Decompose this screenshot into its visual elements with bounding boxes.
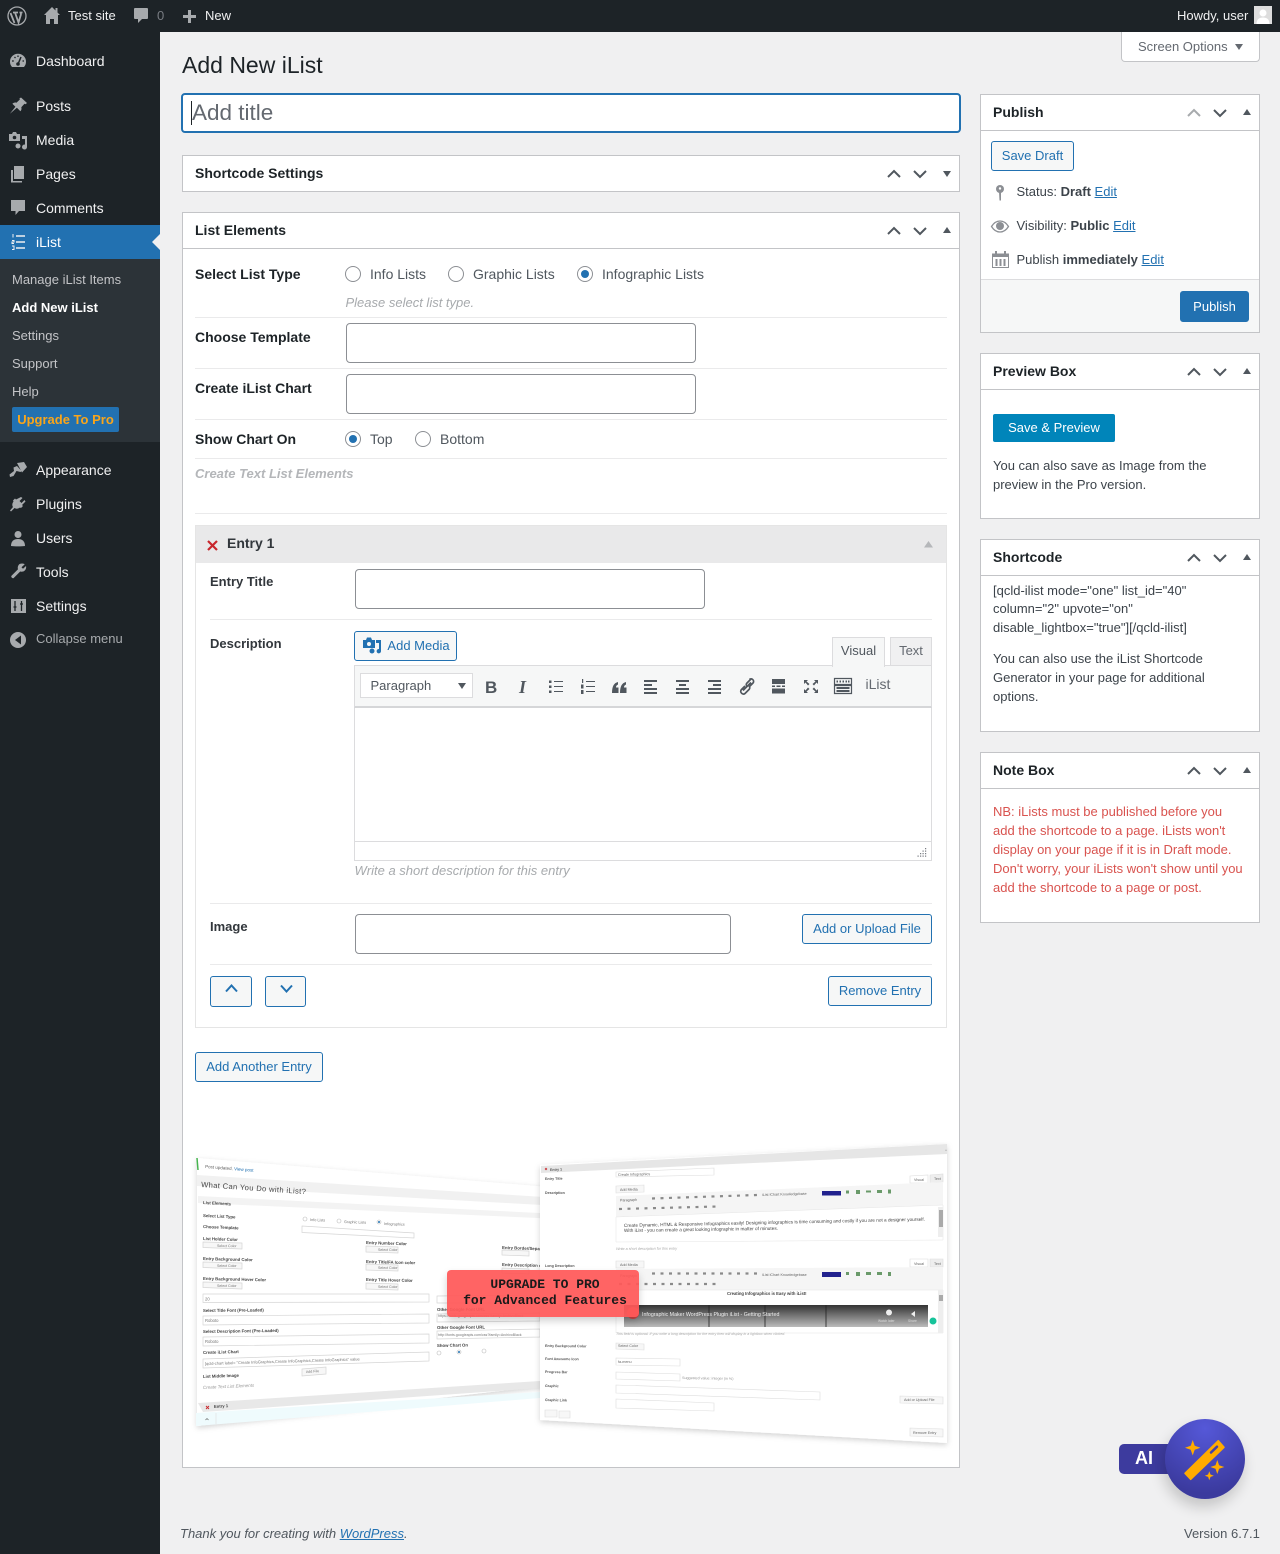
submenu background xyxy=(0,259,160,442)
label: select list type: Select List Type xyxy=(195,266,301,282)
menu: Tools: Tools xyxy=(36,564,69,580)
visibility row: Visibility: Public Edit xyxy=(1016,218,1136,233)
icon: settings xyxy=(11,599,26,613)
icon: users xyxy=(11,531,25,546)
panel: publish xyxy=(980,94,1260,333)
form rows xyxy=(195,266,947,514)
panel controls xyxy=(887,226,951,236)
shortcode note xyxy=(993,651,1205,704)
icon: tools xyxy=(11,564,26,578)
screenshot: right entry editor: iList iChart Knowledgebase xyxy=(762,1192,807,1197)
screen options tab: Screen Options xyxy=(1138,39,1228,54)
add another entry button: Add Another Entry xyxy=(206,1059,312,1074)
option: top: Top xyxy=(370,431,393,447)
entry header xyxy=(196,526,946,563)
label: description: Description xyxy=(210,636,282,651)
add or upload button xyxy=(802,914,932,944)
preview note: preview in the Pro version. xyxy=(993,477,1146,492)
input: image xyxy=(355,914,731,954)
screenshot: left settings form: https://fonts.googleapis.com/css?family=ArchivoBlack xyxy=(438,1314,524,1318)
note text: add the shortcode to a page or post. xyxy=(993,880,1202,895)
screenshot: left settings form: Select Color xyxy=(217,1264,237,1268)
tab: visual: Visual xyxy=(841,643,876,658)
shortcode text xyxy=(993,582,1187,634)
label: show chart on: Show Chart On xyxy=(195,431,296,447)
note text xyxy=(993,804,1243,895)
screenshot: left settings form xyxy=(196,1158,560,1426)
screenshot: left settings form: Select Color xyxy=(378,1285,398,1289)
active item: iList xyxy=(0,225,160,259)
screenshot: right entry editor: Description xyxy=(545,1191,565,1195)
screenshot: left settings form: Create Text List Elements xyxy=(203,1383,255,1390)
submenu: Help: Help xyxy=(12,384,39,399)
screenshot: right entry editor: Select Color xyxy=(618,1344,639,1348)
screenshot: right entry editor: Entry Title xyxy=(545,1177,563,1181)
screenshot: right entry editor: Add or Upload File xyxy=(904,1398,935,1402)
screenshot: right entry editor: This field is optional. If you write a long description for the entry then will display in a lightbox when clicked. xyxy=(616,1332,785,1336)
screenshot: left settings form: Infographics xyxy=(384,1222,405,1227)
note text: add the shortcode to a page. iLists won't xyxy=(993,823,1225,838)
screenshot: left settings form: What Can You Do with iList? xyxy=(201,1180,307,1196)
option: infographic lists: Infographic Lists xyxy=(602,266,704,282)
paragraph select xyxy=(360,673,473,698)
move down button xyxy=(265,976,306,1007)
menu: Appearance: Appearance xyxy=(36,462,112,478)
tab: text: Text xyxy=(899,643,923,658)
screenshot: left settings form: Select Color xyxy=(217,1244,237,1248)
screenshot: left settings form: Entry Background Hover Color xyxy=(203,1276,266,1282)
publish footer xyxy=(981,279,1259,332)
screenshot: left settings form: Info Lists xyxy=(310,1218,325,1223)
upgrade callout: for Advanced Features xyxy=(463,1293,627,1308)
preview note xyxy=(993,458,1206,492)
heading: List Elements xyxy=(195,222,286,238)
upgrade callout xyxy=(447,1270,639,1317)
add media button: Add Media xyxy=(387,638,450,653)
AI label: AI xyxy=(1135,1448,1153,1468)
section note: Create Text List Elements xyxy=(195,466,353,481)
note text: display on your page if it is in Draft mode. xyxy=(993,842,1231,857)
menu: Pages: Pages xyxy=(36,166,76,182)
icon: collapse xyxy=(924,541,933,548)
screenshot: left settings form: Entry Title/FA Icon color xyxy=(366,1259,416,1265)
editor area xyxy=(354,708,932,843)
label: create chart: Create iList Chart xyxy=(195,380,312,396)
note text: NB: iLists must be published before you xyxy=(993,804,1222,819)
input: entry title xyxy=(355,569,705,609)
screenshot: right entry editor: Text xyxy=(934,1262,941,1266)
publish date row: Publish immediately Edit xyxy=(1016,252,1164,267)
sidebar menu xyxy=(0,32,160,1554)
radio group: chart position xyxy=(345,431,431,447)
screenshot: left settings form: Other Google Font URL xyxy=(437,1325,485,1330)
add or upload button: Add or Upload File xyxy=(813,921,921,936)
screenshot: left settings form: http://fonts.googleapis.com/css?family=ArchivoBlack xyxy=(438,1333,522,1337)
panel controls xyxy=(1187,108,1251,118)
screenshot: left settings form: Entry 1 xyxy=(214,1403,229,1409)
icon: posts pin xyxy=(10,98,27,114)
panel: preview box xyxy=(980,353,1260,519)
entry heading: Entry 1 xyxy=(227,535,274,551)
screenshot: right entry editor: Create Dynamic, HTML & Responsive Infographics easily! Designing infographics is time consuming and costly if you are not a designer yourself. xyxy=(624,1217,925,1228)
shortcode note: You can also use the iList Shortcode xyxy=(993,651,1203,666)
screenshot: right entry editor: Infographic Maker WordPress Plugin iList - Getting Started xyxy=(642,1312,779,1318)
footer thanks: Thank you for creating with WordPress. xyxy=(180,1526,408,1540)
remove entry button xyxy=(828,976,932,1006)
paragraph select: Paragraph xyxy=(370,678,431,693)
admin bar xyxy=(0,0,1280,32)
tab: visual xyxy=(832,637,885,667)
screenshot: right entry editor: Entry Background Color xyxy=(545,1344,587,1348)
icon: pages xyxy=(11,166,24,182)
menu: Posts: Posts xyxy=(36,98,71,114)
avatar xyxy=(1254,6,1272,24)
toolbar icons: I xyxy=(518,677,527,697)
note text: Don't worry, your iLists won't show until you xyxy=(993,861,1243,876)
toolbar icons: B xyxy=(485,678,497,697)
screenshot: left settings form: Add File xyxy=(306,1369,319,1374)
new link: New xyxy=(205,8,231,23)
option: bottom: Bottom xyxy=(440,431,484,447)
status row: Status: Draft Edit xyxy=(1016,184,1117,199)
icon: WordPress logo xyxy=(7,6,27,26)
save and preview button xyxy=(993,414,1115,442)
screenshot: left settings form: Entry Number Color xyxy=(366,1240,407,1246)
screenshot: left settings form: List Holder Color xyxy=(203,1236,238,1242)
screenshot: right entry editor: Graphic xyxy=(545,1384,559,1388)
heading: Preview Box xyxy=(993,363,1076,379)
submenu: Settings: Settings xyxy=(12,328,59,343)
screenshot: left settings form: Entry Background Color xyxy=(203,1256,253,1262)
editor toolbar xyxy=(354,665,932,708)
menu: Collapse menu: Collapse menu xyxy=(36,631,123,646)
input: template xyxy=(346,323,696,363)
screenshot: left settings form: Choose Template xyxy=(203,1224,239,1230)
menu: iList: iList xyxy=(36,234,61,250)
icon: remove xyxy=(207,540,218,551)
panel: shortcode settings xyxy=(182,155,960,192)
screenshot: right entry editor: fa-menu xyxy=(618,1360,632,1364)
screenshot: left settings form: Entry Title Hover Color xyxy=(366,1277,413,1283)
comment count: 0 xyxy=(157,8,164,23)
save and preview button: Save & Preview xyxy=(1008,420,1100,435)
header xyxy=(981,753,1259,789)
screenshot: right entry editor: Add Media xyxy=(620,1188,639,1192)
header xyxy=(981,540,1259,576)
icon: calendar xyxy=(992,251,1009,268)
upgrade button xyxy=(12,407,119,432)
screenshot: right entry editor: Add Media xyxy=(620,1263,639,1267)
screenshot: left settings form: Select List Type xyxy=(203,1213,236,1219)
menu labels xyxy=(12,53,123,646)
screenshot: right entry editor: Font Awesome Icon xyxy=(545,1357,579,1361)
publish button: Publish xyxy=(1193,299,1236,314)
screenshot: right entry editor: Progress Bar xyxy=(545,1370,568,1374)
icon: media xyxy=(9,132,27,150)
screenshot: left settings form: Create iList Chart xyxy=(203,1349,239,1355)
screenshot: left settings form: Post updated. View post xyxy=(205,1164,254,1173)
shortcode text: column="2" upvote="on" xyxy=(993,601,1133,616)
icon: comments xyxy=(11,200,25,215)
screenshot: right entry editor: Write a short description for this entry xyxy=(616,1247,678,1251)
wand circle xyxy=(1165,1419,1245,1499)
screenshot: left settings form: Graphic Lists xyxy=(344,1220,366,1225)
screenshot: right entry editor: Paragraph xyxy=(620,1198,637,1202)
input: chart xyxy=(346,374,696,414)
menu: Dashboard: Dashboard xyxy=(36,53,104,69)
panel controls xyxy=(1187,766,1251,776)
screenshot: right entry editor: Paragraph xyxy=(620,1274,637,1278)
screenshot: left settings form: Select Description Font (Pre-Loaded) xyxy=(203,1328,279,1334)
heading: Publish xyxy=(993,104,1044,120)
panel: note box xyxy=(980,752,1260,923)
icon: plus xyxy=(183,10,196,23)
icon: visibility eye xyxy=(990,220,1010,233)
upgrade callout: UPGRADE TO PRO xyxy=(490,1277,600,1292)
screenshot: left settings form: 20 xyxy=(205,1296,210,1302)
screenshot: right entry editor: Graphic Link xyxy=(545,1398,567,1402)
panel: shortcode xyxy=(980,539,1260,732)
screenshot: right entry editor: Remove Entry xyxy=(913,1431,937,1435)
preview note: You can also save as Image from the xyxy=(993,458,1206,473)
site name: Test site xyxy=(68,8,116,23)
iList button: iList xyxy=(866,676,890,692)
label: image: Image xyxy=(210,919,248,934)
submenu: Add New iList: Add New iList xyxy=(12,300,98,315)
howdy greeting: Howdy, user xyxy=(1177,8,1248,23)
screenshot: left settings form: List Middle Image xyxy=(203,1373,240,1379)
screenshot: left settings form: Roboto xyxy=(205,1318,219,1323)
screenshot: left settings form: Entry Description color xyxy=(502,1262,550,1268)
submenu: Manage iList Items: Manage iList Items xyxy=(12,272,121,287)
heading: Shortcode Settings xyxy=(195,165,323,181)
save draft button: Save Draft xyxy=(1002,148,1063,163)
publish button xyxy=(1180,291,1249,322)
editor status bar xyxy=(354,841,932,861)
screenshot: right entry editor: iList iChart Knowledgebase xyxy=(762,1273,807,1277)
screenshot: left settings form: Select Color xyxy=(378,1248,398,1252)
icon: plugins xyxy=(10,497,26,512)
screenshot: left settings form: Roboto xyxy=(205,1339,219,1344)
title input: Add title xyxy=(192,100,273,125)
title input xyxy=(181,93,961,133)
screenshot: left settings form: Entry Border/Separator xyxy=(502,1245,550,1252)
panel: entry 1 xyxy=(195,525,947,1028)
icon: status pin xyxy=(996,185,1004,200)
hint: description: Write a short description for this entry xyxy=(354,863,570,878)
upgrade button: Upgrade To Pro xyxy=(17,412,114,427)
screenshot: left settings form: List Elements xyxy=(203,1200,232,1206)
submenu: Support: Support xyxy=(12,356,58,371)
AI label xyxy=(1119,1444,1179,1474)
shortcode text: disable_lightbox="true"][/qcld-ilist] xyxy=(993,620,1187,634)
heading: Note Box xyxy=(993,762,1054,778)
footer version: Version 6.7.1 xyxy=(1184,1526,1260,1540)
menu: Users: Users xyxy=(36,530,73,546)
screenshot: left settings form: [qcld-chart label= "Create InfoGraphics,Create InfoGraphics,Create InfoGraphics" value xyxy=(205,1356,361,1366)
screenshot: right entry editor xyxy=(540,1144,947,1443)
save draft button xyxy=(991,141,1074,171)
screenshot: right entry editor: Suggested value: integer (in %) xyxy=(682,1376,733,1381)
icon: collapse xyxy=(10,632,26,648)
remove entry button: Remove Entry xyxy=(839,983,921,998)
label: entry title: Entry Title xyxy=(210,574,273,589)
icon: magic wand xyxy=(1184,1440,1225,1480)
shortcode note: options. xyxy=(993,689,1039,704)
menu: Media: Media xyxy=(36,132,74,148)
screenshot: right entry editor: Text xyxy=(934,1177,941,1181)
screenshot: right entry editor: Visual xyxy=(914,1262,924,1266)
icon: dashboard xyxy=(10,54,26,67)
panel controls xyxy=(887,170,951,178)
header xyxy=(183,213,959,249)
icon: home xyxy=(44,7,60,24)
icon: appearance xyxy=(10,462,27,477)
header xyxy=(981,354,1259,390)
heading: Shortcode xyxy=(993,549,1062,565)
tab: text xyxy=(890,637,932,666)
screenshot: right entry editor: With iList - you can create a great looking infographic in matter of minutes. xyxy=(624,1226,778,1233)
screenshot: right entry editor: Share xyxy=(908,1319,917,1323)
radio group: list type xyxy=(345,266,593,282)
screenshot: right entry editor: Watch later xyxy=(878,1319,895,1323)
screenshot: right entry editor: Creating Infographics is Easy with iList! xyxy=(727,1291,807,1296)
toolbar icons xyxy=(485,677,852,697)
screenshot: left settings form: Other Google Font URL xyxy=(437,1307,485,1312)
screenshot: right entry editor: Long Description xyxy=(545,1264,575,1268)
add media button xyxy=(354,631,457,661)
screenshot: left settings form: Select Color xyxy=(378,1266,398,1270)
shortcode note: Generator in your page for additional xyxy=(993,670,1205,685)
label: choose template: Choose Template xyxy=(195,329,311,345)
screenshot: left settings form: Show Chart On xyxy=(437,1342,468,1348)
shortcode text: [qcld-ilist mode="one" list_id="40" xyxy=(993,582,1186,598)
menu: Settings: Settings xyxy=(36,598,87,614)
screen options tab xyxy=(1121,32,1260,62)
option: info lists: Info Lists xyxy=(370,266,426,282)
icon: comments xyxy=(134,8,148,23)
screenshot: left settings form: Select Title Font (Pre-Loaded) xyxy=(203,1307,264,1313)
screenshot: right entry editor: Entry 1 xyxy=(550,1168,562,1172)
AI assistant badge xyxy=(1119,1419,1248,1512)
sidebar icons xyxy=(9,54,27,648)
add another entry button xyxy=(195,1052,323,1082)
icon: iList list xyxy=(12,234,25,250)
panel: list elements xyxy=(182,212,960,1468)
menu: Comments: Comments xyxy=(36,200,104,216)
menu: Plugins: Plugins xyxy=(36,496,82,512)
page title: Add New iList xyxy=(182,52,323,78)
hint: Please select list type. xyxy=(346,295,474,310)
move up button xyxy=(210,976,252,1007)
panel controls xyxy=(1187,554,1251,562)
screenshot: left settings form: Select Color xyxy=(217,1284,237,1288)
panel controls xyxy=(1187,368,1251,376)
option: graphic lists: Graphic Lists xyxy=(473,266,555,282)
screenshot: right entry editor: Visual xyxy=(914,1178,924,1182)
header xyxy=(981,95,1259,131)
screenshot: right entry editor: Create Infographics xyxy=(618,1172,650,1177)
